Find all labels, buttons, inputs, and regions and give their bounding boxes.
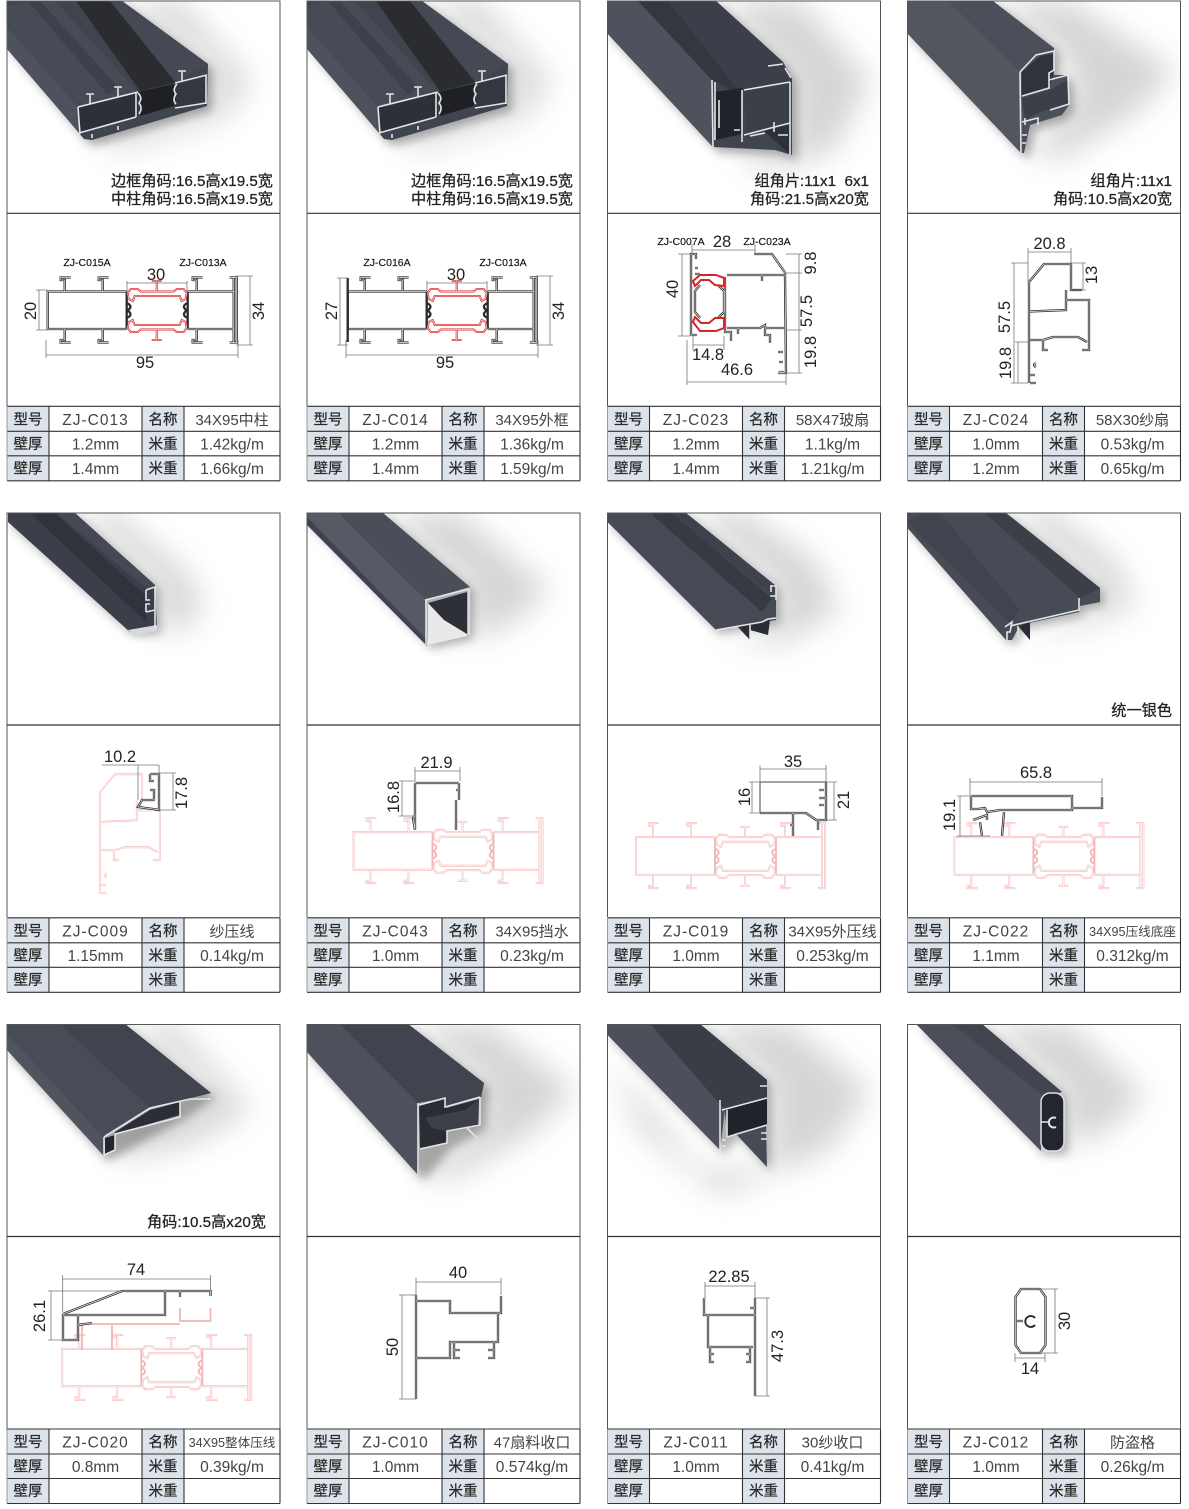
spec table: ZJ-C022: ZJ-C022 <box>963 923 1029 940</box>
dimensions: ZJ-C007A <box>657 236 705 248</box>
dimensions: 30 <box>447 266 465 284</box>
caption: 边框角码:16.5高x19.5宽 <box>111 173 273 190</box>
spec table: ZJ-C012: 型号 <box>914 1434 943 1451</box>
photo: ZJ-C012 extrusion <box>917 1025 1147 1162</box>
spec table: ZJ-C020: 壁厚 <box>14 1458 42 1476</box>
caption: 角码:10.5高x20宽 <box>147 1214 266 1231</box>
dimensions: 27 <box>323 302 341 320</box>
photo: ZJ-C019 extrusion <box>608 514 844 654</box>
spec table: ZJ-C024: 1.2mm <box>972 461 1020 478</box>
dimensions: 35 <box>784 753 802 771</box>
spec table: ZJ-C043: 1.0mm <box>372 948 419 965</box>
spec table: ZJ-C019: 34X95外压线 <box>788 923 877 940</box>
spec table: ZJ-C014: 型号 <box>314 411 342 428</box>
dimensions <box>385 754 460 816</box>
dimensions: ZJ-C016A <box>363 257 411 269</box>
spec table: ZJ-C043: 米重 <box>448 947 478 964</box>
spec table: ZJ-C022: 壁厚 <box>914 972 943 989</box>
photo: ZJ-C010 extrusion <box>308 1025 576 1189</box>
spec table: ZJ-C012: 米重 <box>1049 1483 1078 1500</box>
spec table: ZJ-C012: 壁厚 <box>914 1483 943 1500</box>
spec table: ZJ-C023: ZJ-C023 <box>663 412 729 429</box>
card: ZJ-C019 <box>608 513 880 992</box>
dimensions: 57.5 <box>996 301 1014 333</box>
spec table: ZJ-C023: 名称 <box>749 411 778 428</box>
spec table: ZJ-C019: 名称 <box>749 923 778 940</box>
caption: 中柱角码:16.5高x19.5宽 <box>411 191 573 208</box>
spec table: ZJ-C024: 米重 <box>1049 436 1078 453</box>
spec table: ZJ-C010: 0.574kg/m <box>496 1459 568 1476</box>
spec table: ZJ-C013: 米重 <box>148 460 178 477</box>
caption: 组角片:11x1 6x1 <box>754 173 869 190</box>
section drawing: ZJ-C009 <box>100 748 191 893</box>
card: ZJ-C023 <box>607 1 880 481</box>
spec table: ZJ-C009: 型号 <box>14 923 42 940</box>
spec table: ZJ-C010: 1.0mm <box>372 1459 419 1476</box>
spec table: ZJ-C022: 米重 <box>1049 947 1078 964</box>
dimensions <box>1015 1289 1074 1378</box>
spec table: ZJ-C024: 型号 <box>914 411 943 428</box>
spec table: ZJ-C020: 名称 <box>148 1434 178 1451</box>
spec table: ZJ-C019: 壁厚 <box>614 947 643 964</box>
spec table: ZJ-C013: 1.66kg/m <box>200 461 264 478</box>
dimensions: 57.5 <box>798 295 816 327</box>
dimensions: 10.2 <box>104 748 136 766</box>
dimensions: 74 <box>127 1261 145 1279</box>
spec table: ZJ-C014: 1.36kg/m <box>500 436 564 453</box>
photo: ZJ-C020 extrusion <box>8 1025 251 1167</box>
dimensions: 14.8 <box>692 346 724 364</box>
photo: ZJ-C043 extrusion <box>308 514 551 654</box>
spec table: ZJ-C023: 壁厚 <box>614 460 643 477</box>
dimensions: 40 <box>664 280 682 298</box>
spec table: ZJ-C013: 1.2mm <box>72 436 119 453</box>
section drawing: ZJ-C023 <box>657 233 820 385</box>
dimensions <box>323 257 568 372</box>
photo: ZJ-C022 extrusion <box>908 514 1139 649</box>
spec table: ZJ-C011: 壁厚 <box>614 1458 643 1476</box>
spec table: ZJ-C014: 名称 <box>448 411 478 428</box>
spec table: ZJ-C022: 型号 <box>914 923 943 940</box>
spec table: ZJ-C009: 名称 <box>148 923 178 940</box>
photo: ZJ-C011 extrusion <box>608 1025 874 1200</box>
dimensions: 65.8 <box>1020 764 1052 782</box>
spec table: ZJ-C013: 米重 <box>148 436 178 453</box>
spec table: ZJ-C043: 名称 <box>448 923 478 940</box>
spec table: ZJ-C020: 米重 <box>148 1458 178 1476</box>
spec table: ZJ-C019: 型号 <box>614 923 643 940</box>
dimensions: ZJ-C023A <box>743 236 791 248</box>
dimensions: 17.8 <box>173 777 191 809</box>
spec table: ZJ-C011: 米重 <box>749 1458 778 1476</box>
dimensions: 20 <box>22 302 40 320</box>
dimensions: 19.1 <box>941 799 959 831</box>
spec table: ZJ-C023: 58X47玻扇 <box>796 412 869 429</box>
spec table: ZJ-C014 <box>307 406 580 481</box>
spec table: ZJ-C012: 名称 <box>1049 1434 1078 1451</box>
spec table: ZJ-C011: 1.0mm <box>672 1459 720 1476</box>
spec table: ZJ-C012: 壁厚 <box>914 1458 943 1476</box>
spec table: ZJ-C023: 米重 <box>749 436 778 453</box>
dimensions: 16.8 <box>385 781 403 813</box>
spec table: ZJ-C022: 0.312kg/m <box>1096 948 1169 965</box>
dimensions: 22.85 <box>708 1268 750 1286</box>
dimensions: 95 <box>436 354 454 372</box>
card: ZJ-C020 <box>7 1024 280 1504</box>
spec table: ZJ-C009: 纱压线 <box>209 923 255 940</box>
spec table: ZJ-C010: 米重 <box>448 1483 478 1500</box>
spec table: ZJ-C043: 米重 <box>448 972 478 989</box>
section drawing: ZJ-C013 <box>22 257 268 372</box>
dimensions <box>996 235 1101 383</box>
spec table: ZJ-C009: ZJ-C009 <box>62 923 129 940</box>
dimensions: ZJ-C015A <box>63 257 111 269</box>
spec table: ZJ-C014: 34X95外框 <box>495 412 569 429</box>
dimensions: 14 <box>1021 1360 1039 1378</box>
spec table: ZJ-C022: 米重 <box>1049 972 1078 989</box>
dimensions: ZJ-C013A <box>479 257 527 269</box>
spec table: ZJ-C010: ZJ-C010 <box>362 1434 429 1452</box>
spec table: ZJ-C043: ZJ-C043 <box>362 923 429 940</box>
spec table: ZJ-C024: 1.0mm <box>972 436 1020 453</box>
spec table: ZJ-C022 <box>908 918 1180 992</box>
dimensions <box>31 1261 210 1340</box>
faint reference profile <box>954 823 1143 889</box>
dimensions <box>657 233 820 385</box>
caption <box>411 173 573 208</box>
spec table: ZJ-C009: 米重 <box>148 947 178 964</box>
card: ZJ-C013 <box>7 1 280 481</box>
spec table: ZJ-C024: 0.53kg/m <box>1101 436 1164 453</box>
section drawing: ZJ-C011 <box>704 1268 787 1396</box>
spec table: ZJ-C024: 58X30纱扇 <box>1096 412 1169 429</box>
card: ZJ-C010 <box>307 1024 580 1504</box>
dimensions: 47.3 <box>769 1330 787 1362</box>
spec table: ZJ-C013: 壁厚 <box>14 460 42 477</box>
card: ZJ-C012 <box>908 1024 1180 1504</box>
spec table: ZJ-C014: 壁厚 <box>314 460 342 477</box>
caption: 边框角码:16.5高x19.5宽 <box>411 173 573 190</box>
faint reference profile <box>62 1334 251 1400</box>
spec table: ZJ-C023: 1.21kg/m <box>801 461 864 478</box>
spec table: ZJ-C023: 型号 <box>614 411 643 428</box>
dimensions: 40 <box>449 1264 467 1282</box>
spec table: ZJ-C009: 米重 <box>148 972 178 989</box>
spec table: ZJ-C022: 1.1mm <box>972 948 1020 965</box>
section drawing: ZJ-C024 <box>996 235 1101 383</box>
caption <box>111 173 273 208</box>
spec table: ZJ-C011: 0.41kg/m <box>801 1459 864 1476</box>
caption <box>1053 173 1172 208</box>
spec table: ZJ-C013: 1.42kg/m <box>200 436 264 453</box>
spec table: ZJ-C020: 壁厚 <box>14 1483 42 1500</box>
spec table: ZJ-C020: ZJ-C020 <box>62 1434 129 1452</box>
spec table: ZJ-C024 <box>908 406 1180 481</box>
spec table: ZJ-C024: 壁厚 <box>914 436 943 453</box>
dimensions: 30 <box>1056 1312 1074 1330</box>
spec table: ZJ-C043: 型号 <box>314 923 342 940</box>
card: ZJ-C024 <box>907 1 1180 481</box>
section drawing: ZJ-C012 <box>1015 1289 1074 1378</box>
dimensions <box>384 1264 501 1399</box>
spec table: ZJ-C024: 米重 <box>1049 460 1078 477</box>
spec table: ZJ-C010: 名称 <box>448 1434 478 1451</box>
spec table: ZJ-C043: 壁厚 <box>314 972 342 989</box>
spec table: ZJ-C013: 型号 <box>14 411 42 428</box>
spec table: ZJ-C011 <box>608 1429 880 1504</box>
dimensions <box>736 753 853 820</box>
section drawing: ZJ-C020 <box>31 1261 251 1400</box>
spec table: ZJ-C024: 壁厚 <box>914 460 943 477</box>
dimensions: 95 <box>136 354 154 372</box>
spec table: ZJ-C014: 米重 <box>448 436 478 453</box>
spec table: ZJ-C011: 型号 <box>614 1434 643 1451</box>
card: ZJ-C043 <box>307 513 580 992</box>
spec table: ZJ-C019: 1.0mm <box>672 948 720 965</box>
spec table: ZJ-C014: ZJ-C014 <box>362 412 429 429</box>
spec table: ZJ-C011: 壁厚 <box>614 1483 643 1500</box>
dimensions: 46.6 <box>721 361 753 379</box>
dimensions: 20.8 <box>1033 235 1066 253</box>
dimensions <box>941 764 1102 836</box>
spec table: ZJ-C043: 壁厚 <box>314 947 342 964</box>
photo: ZJ-C009 extrusion <box>8 514 210 642</box>
spec table: ZJ-C012 <box>908 1429 1180 1504</box>
spec table: ZJ-C019 <box>608 918 880 992</box>
caption: 组角片:11x1 <box>1090 173 1172 190</box>
spec table: ZJ-C023: 1.4mm <box>672 461 720 478</box>
dimensions: 9.8 <box>802 252 820 274</box>
dimensions: 28 <box>713 233 731 251</box>
spec table: ZJ-C010: 型号 <box>314 1434 342 1451</box>
spec table: ZJ-C009: 1.15mm <box>68 948 124 965</box>
spec table: ZJ-C020: 0.8mm <box>72 1459 119 1476</box>
faint reference profile <box>636 823 825 889</box>
spec table: ZJ-C022: 名称 <box>1049 923 1078 940</box>
caption: 中柱角码:16.5高x19.5宽 <box>111 191 273 208</box>
card: ZJ-C022 <box>908 513 1180 992</box>
caption: 角码:21.5高x20宽 <box>750 191 869 208</box>
spec table: ZJ-C023: 1.1kg/m <box>805 436 860 453</box>
spec table: ZJ-C019: 0.253kg/m <box>796 948 869 965</box>
dimensions: 21 <box>835 791 853 809</box>
spec table: ZJ-C019: 米重 <box>749 972 778 989</box>
card: ZJ-C009 <box>7 513 280 992</box>
spec table: ZJ-C013: ZJ-C013 <box>62 412 129 429</box>
card: ZJ-C014 <box>307 1 580 481</box>
spec table: ZJ-C014: 1.59kg/m <box>500 461 564 478</box>
dimensions: 21.9 <box>420 754 453 772</box>
dimensions: 50 <box>384 1338 402 1356</box>
dimensions: 19.8 <box>802 336 820 368</box>
spec table: ZJ-C019: 米重 <box>749 947 778 964</box>
spec table: ZJ-C043: 34X95挡水 <box>495 923 569 940</box>
spec table: ZJ-C013: 名称 <box>148 411 178 428</box>
dimensions: 19.8 <box>997 347 1015 379</box>
photo: ZJ-C023 extrusion <box>608 2 876 181</box>
dimensions <box>102 748 191 810</box>
dimensions <box>22 257 268 372</box>
caption <box>750 173 869 208</box>
dimensions <box>705 1268 787 1396</box>
spec table: ZJ-C019: 壁厚 <box>614 972 643 989</box>
spec table: ZJ-C020: 34X95整体压线 <box>189 1436 276 1450</box>
spec table: ZJ-C009: 壁厚 <box>14 947 42 964</box>
spec table: ZJ-C011: ZJ-C011 <box>663 1434 729 1452</box>
card: ZJ-C011 <box>608 1024 880 1504</box>
spec table: ZJ-C011: 30纱收口 <box>802 1434 863 1452</box>
spec table: ZJ-C012: 米重 <box>1049 1458 1078 1476</box>
dimensions: 34 <box>550 302 568 320</box>
spec table: ZJ-C014: 1.4mm <box>372 461 419 478</box>
spec table: ZJ-C019: ZJ-C019 <box>663 923 729 940</box>
spec table: ZJ-C022: 34X95压线底座 <box>1089 924 1176 939</box>
spec table: ZJ-C009 <box>7 918 280 992</box>
caption: 统一银色 <box>1111 702 1172 720</box>
spec table: ZJ-C010: 米重 <box>448 1458 478 1476</box>
faint reference profile <box>354 818 542 884</box>
spec table: ZJ-C010: 壁厚 <box>314 1483 342 1500</box>
spec table: ZJ-C020 <box>7 1429 280 1504</box>
spec table: ZJ-C013: 34X95中柱 <box>195 412 269 429</box>
dimensions: 30 <box>147 266 165 284</box>
spec table: ZJ-C012: ZJ-C012 <box>963 1434 1029 1452</box>
spec table: ZJ-C023: 1.2mm <box>672 436 720 453</box>
photo: ZJ-C014 extrusion <box>308 2 554 156</box>
spec table: ZJ-C043: 0.23kg/m <box>500 948 564 965</box>
spec table: ZJ-C024: 0.65kg/m <box>1101 461 1164 478</box>
spec table: ZJ-C010 <box>307 1429 580 1504</box>
dimensions: 26.1 <box>31 1300 49 1332</box>
spec table: ZJ-C010: 47扇料收口 <box>494 1434 570 1452</box>
spec table: ZJ-C023 <box>608 406 880 481</box>
spec table: ZJ-C023: 壁厚 <box>614 436 643 453</box>
spec table: ZJ-C010: 壁厚 <box>314 1458 342 1476</box>
spec table: ZJ-C011: 名称 <box>749 1434 778 1451</box>
spec table: ZJ-C020: 米重 <box>148 1483 178 1500</box>
spec table: ZJ-C024: ZJ-C024 <box>963 412 1029 429</box>
spec table: ZJ-C014: 壁厚 <box>314 436 342 453</box>
spec table: ZJ-C014: 米重 <box>448 460 478 477</box>
section drawing: ZJ-C014 <box>323 257 568 372</box>
spec table: ZJ-C023: 米重 <box>749 460 778 477</box>
spec table: ZJ-C011: 米重 <box>749 1483 778 1500</box>
dimensions: 13 <box>1083 266 1101 284</box>
spec table: ZJ-C022: 壁厚 <box>914 947 943 964</box>
spec table: ZJ-C020: 0.39kg/m <box>200 1459 264 1476</box>
spec table: ZJ-C009: 0.14kg/m <box>200 948 264 965</box>
spec table: ZJ-C012: 1.0mm <box>972 1459 1020 1476</box>
spec table: ZJ-C012: 防盗格 <box>1110 1434 1155 1452</box>
section drawing: ZJ-C019 <box>636 753 853 889</box>
spec table: ZJ-C013 <box>7 406 280 481</box>
spec table: ZJ-C009: 壁厚 <box>14 972 42 989</box>
faint reference frame <box>100 774 160 893</box>
caption: 角码:10.5高x20宽 <box>1053 191 1172 208</box>
dimensions: 34 <box>250 302 268 320</box>
dimensions: 16 <box>736 788 754 806</box>
spec table: ZJ-C014: 1.2mm <box>372 436 419 453</box>
spec table: ZJ-C020: 型号 <box>14 1434 42 1451</box>
photo: ZJ-C013 extrusion <box>8 2 254 156</box>
spec table: ZJ-C024: 名称 <box>1049 411 1078 428</box>
section drawing: ZJ-C043 <box>354 754 542 884</box>
section drawing: ZJ-C010 <box>384 1264 501 1399</box>
spec table: ZJ-C012: 0.26kg/m <box>1101 1459 1164 1476</box>
photo: ZJ-C024 extrusion <box>908 2 1176 167</box>
section drawing: ZJ-C022 <box>941 764 1143 889</box>
spec table: ZJ-C013: 壁厚 <box>14 436 42 453</box>
spec table: ZJ-C043 <box>307 918 580 992</box>
spec table: ZJ-C013: 1.4mm <box>72 461 119 478</box>
dimensions: ZJ-C013A <box>179 257 227 269</box>
